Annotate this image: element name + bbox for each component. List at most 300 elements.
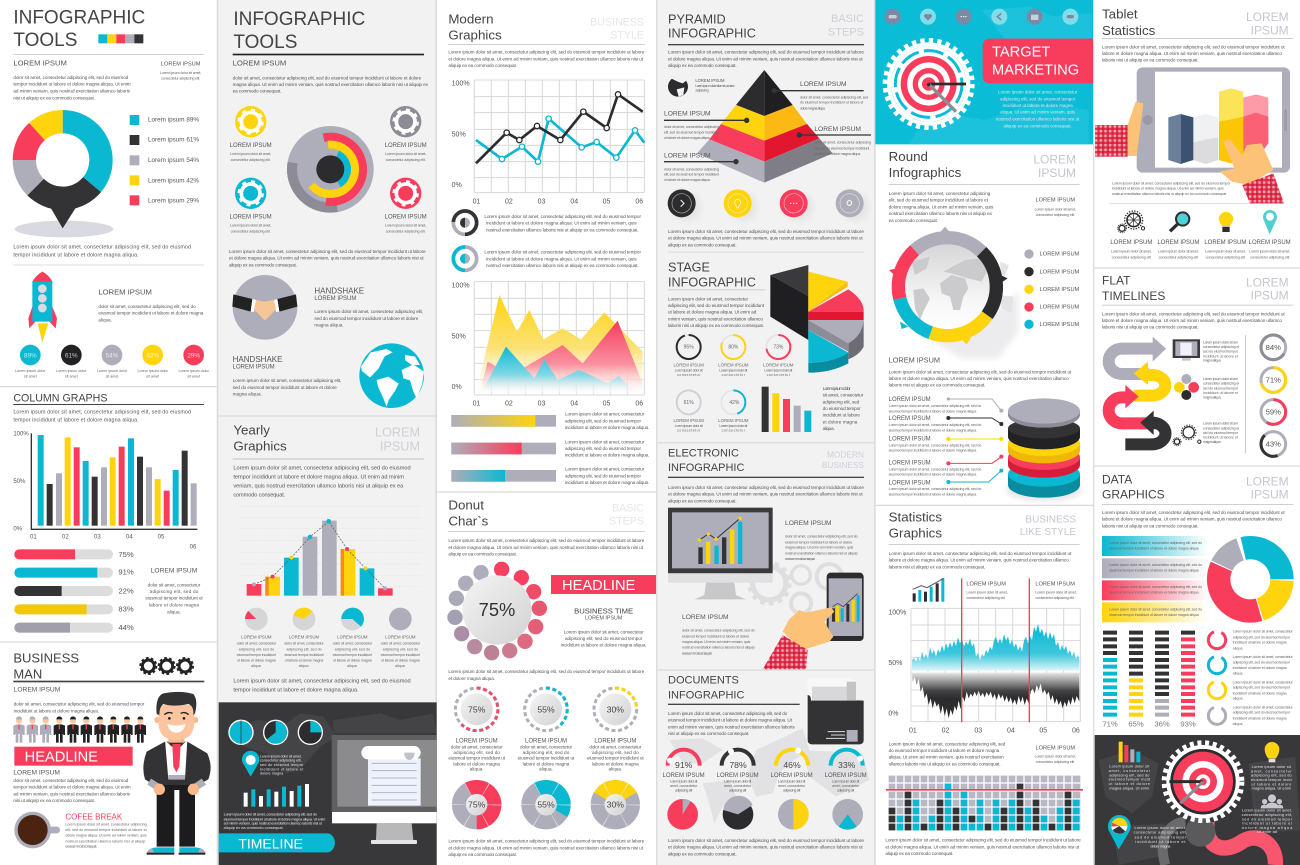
callout: gray: dolor sit amet, consectetur adipiscing [664, 167, 719, 171]
pie captions: adipiscing elit, sed do [383, 647, 418, 651]
mini bar icon [913, 578, 944, 602]
text: ex ea commodo consequat. [785, 557, 815, 561]
text: dolor sit amet, consectetur adipiscing elit, sed do eiusmod [13, 778, 129, 783]
icon captions: LOREM IPSUM [1204, 240, 1246, 246]
text [885, 838, 1081, 856]
business time text: Lorem ipsum dolor sit amet, consectetur [564, 629, 644, 634]
text: Lorem ipsum dolor sit amet, consectetur adipiscing elit, sed do [668, 711, 788, 716]
white text bottom: incididunt ut labore et [1135, 840, 1186, 844]
dashed donut 30%: 30% [607, 704, 624, 714]
heading: LIKE STYLE [1020, 527, 1076, 538]
callout: gray: elit, sed do eiusmod tempor incididunt [664, 173, 719, 177]
gauge captions: Lorem ipsum dolor sit [670, 780, 697, 784]
text: incididunt ut labore et dolore magna aliqua. Ut enim ad minim veniam, quis [1112, 187, 1224, 191]
gear labels: Lorem ipsum dolor sit amet, [385, 152, 426, 156]
gear labels: LOREM IPSUM [230, 215, 272, 221]
gradient bar text: adipiscing elit, sed do eiusmod tempor [565, 446, 641, 451]
percentage rings: 43% [1266, 440, 1281, 449]
percentage circles: sit amet [187, 375, 200, 379]
white text right: eiusmod tempor incid [1251, 778, 1292, 782]
text: LOREM IPSUM [1036, 198, 1075, 204]
percentage circles: Lorem ipsum dolor [15, 369, 46, 373]
progress rings: 42% [729, 400, 740, 406]
white text left: magna aliqua. Ut enim [1109, 786, 1149, 790]
pie captions: eiusmod tempor incididunt [284, 653, 324, 657]
pin text: incididunt ut labore et [260, 767, 303, 771]
text: elit, sed do eiusmod tempor incididunt ut labore et [889, 198, 989, 203]
donut captions: aliqua. [539, 767, 553, 772]
intro text: nisi ut aliquip ex ea commodo consequat. [13, 95, 95, 100]
labels [966, 581, 1077, 600]
heading: GRAPHICS [1102, 488, 1165, 502]
heading: LOREM [375, 426, 420, 440]
gradient bar text: Lorem ipsum dolor sit amet, consectetur [565, 467, 645, 472]
ring captions: consectetur [722, 428, 746, 432]
percentage rings: 84% [1266, 343, 1281, 352]
text: ex ea commodo consequat. [682, 651, 712, 655]
heading [668, 261, 765, 290]
pie captions: LOREM IPSUM [337, 635, 368, 640]
text [785, 520, 858, 561]
text: labore et dolore magna aliqua. Ut enim ad minim veniam, quis nostrud exercitation ullamco [1102, 51, 1282, 56]
progress text: adipiscing elit, sed do [150, 589, 199, 594]
percentage rings [1256, 330, 1290, 460]
text: LOREM IPSUM [889, 356, 940, 365]
panel: donut charts [447, 497, 656, 857]
heading: LOREM [1033, 153, 1076, 167]
heading: Lorem ipsum dolor sit amet, consectetur adipiscing elit, sed do eiusmod [13, 410, 191, 416]
heading: Modern [448, 11, 494, 26]
text [448, 538, 645, 557]
intro text: dolor sit amet, consectetur adipiscing elit, sed do eiusmod [13, 75, 129, 80]
bar chart: 0% [13, 526, 23, 532]
percentage circles: 54% [106, 352, 119, 359]
intro text: ea commodo consequat. [233, 89, 281, 94]
icon captions: Lorem ipsum dolor sit amet, [1205, 250, 1246, 254]
gradient bar text: incididunt ut labore et dolore magna aliqua. [565, 453, 649, 458]
text: Lorem ipsum dolor [823, 386, 851, 391]
text: Lorem ipsum dolor sit amet, consectetur adipiscing elit, sed do eiusmod tempor [1112, 181, 1231, 185]
text: aliquip ex ea commodo consequat. [229, 262, 297, 267]
text: dolor sit amet, consectetur adipiscing elit, sed do [785, 535, 858, 539]
stack callouts: eiusmod tempor incididunt ut labore et dolore magna aliqua. [889, 473, 977, 477]
donut captions: labore et dolore magna [592, 761, 639, 766]
headline banner [551, 575, 656, 594]
pie row [245, 608, 412, 630]
donut captions: adipiscing elit, sed do [453, 750, 500, 755]
title [233, 9, 424, 55]
gradient bar text: adipiscing elit, sed do eiusmod tempor [565, 418, 641, 423]
donut captions [448, 739, 644, 772]
title: TOOLS [13, 30, 77, 51]
text [668, 485, 864, 503]
text: nostrud exercitation ullamco laboris nisi ut aliquip [785, 551, 858, 555]
text: incididunt ut labore et dolore magna aliqua. [14, 708, 99, 713]
progress text [145, 568, 203, 614]
donut captions: dolor sit amet, consectetur [451, 744, 503, 749]
text [1102, 44, 1285, 63]
white text: incididunt ut labore et dolore magna [1003, 103, 1073, 108]
gradient labels: eiusmod tempor incididunt ut labore et dolore magna aliqua [1109, 591, 1200, 595]
waveform chart: 06 [1072, 728, 1080, 735]
line chart: 02 [505, 199, 513, 206]
progress text: dolor sit amet, consectetur [148, 582, 201, 587]
bar chart [244, 784, 309, 807]
heading [233, 423, 424, 460]
intro text: Lorem ipsum dolor sit amet, [160, 71, 201, 75]
gear labels: Lorem ipsum dolor sit amet, [230, 152, 271, 156]
panel: documents infographic [663, 674, 869, 856]
icon captions: LOREM IPSUM [1249, 240, 1291, 246]
white text left: Lorem ipsum dolor sit [1109, 765, 1150, 769]
text: incididunt ut labore et dolore magna aliqua. Ut enim ad minim veniam, quis [486, 221, 637, 226]
text [889, 356, 1072, 388]
coffee break text: elit, sed do eiusmod tempor incididunt ut labore et [65, 828, 147, 832]
icon captions: consectetur adipiscing elit [1159, 255, 1198, 259]
text: adipiscing elit, sed [823, 399, 860, 404]
text: ea commodo consequat. [889, 218, 938, 223]
icon: gears [140, 658, 193, 674]
heading: MODERN [827, 449, 864, 459]
gradient bars [451, 415, 556, 482]
gauge captions: amet, consectetur [724, 784, 752, 788]
text: aliquip ex ea commodo consequat. [448, 63, 517, 68]
progress rings [677, 335, 790, 414]
text: eiusmod tempor incididunt ut labore et dolore magna aliqua. Ut [668, 718, 793, 723]
heading: IPSUM [380, 439, 420, 453]
legend: Lorem ipsum 42% [148, 177, 199, 184]
waveform chart: 0% [888, 711, 898, 718]
ring captions: LOREM IPSUM [718, 418, 749, 423]
waveform chart: 03 [974, 728, 982, 735]
ring text: adipiscing elit, sed do eiusmod tempor [1233, 635, 1291, 639]
big petal donut [447, 562, 547, 660]
icon: document folder [808, 678, 864, 744]
heading: IPSUM [1251, 289, 1289, 303]
text: eiusmod tempor incididunt ut labore et dolore [785, 540, 852, 544]
gradient labels: Lorem ipsum dolor sit amet, consectetur adipiscing elit, sed do [1109, 585, 1202, 589]
stack callouts: LOREM IPSUM [889, 480, 931, 486]
icon captions: LOREM IPSUM [1157, 240, 1199, 246]
text: labore et dolore magna aliqua. Ut enim ad minim veniam, quis nostrud exercitation ullamco [889, 376, 1069, 381]
colour swatches [98, 34, 143, 43]
text: nisi ut aliquip ex ea commodo consequat. [13, 798, 95, 803]
white text lower right: consectetur adipiscing elit, [1242, 813, 1292, 817]
gradient bar text: adipiscing elit, sed do eiusmod tempor [565, 473, 641, 478]
gauge captions: amet, consectetur [778, 784, 806, 788]
timeline text [1203, 340, 1239, 444]
stack callouts: LOREM IPSUM [889, 437, 931, 443]
icon: pointing hand [763, 607, 834, 669]
gradient bar text: incididunt ut labore et dolore magna aliqua. [565, 425, 649, 430]
text: Lorem ipsum dolor sit amet, consectetur adipiscing elit, sed do eiusmod tempor incididunt ut labore [229, 249, 426, 254]
gear labels: consectetur adipiscing elit. [231, 229, 271, 233]
text: laboris nisi ut aliquip ex ea commodo consequat. [1102, 58, 1199, 63]
handshake text 2: sed do eiusmod tempor incididunt ut labore et dolore [233, 385, 337, 390]
rocket text: LOREM IPSUM [98, 288, 152, 297]
timeline text: incididunt ut labore et [1203, 354, 1238, 358]
timeline banner [219, 833, 335, 852]
percentage circles: 89% [24, 352, 37, 359]
heading: BUSINESS [1025, 515, 1076, 526]
gradient labels: eiusmod tempor incididunt ut labore et dolore magna aliqua [1109, 613, 1200, 617]
panel: yearly graphics [233, 423, 424, 694]
heading: STAGE [668, 261, 710, 275]
gauge captions: adipiscing elit [729, 788, 746, 792]
text: nisi ut aliquip ex ea commodo consequat. [668, 731, 749, 736]
bar chart: 05 [158, 535, 165, 541]
callout: gray: ut labore et dolore magna aliqua. [664, 178, 711, 182]
callout: yellow: ut labore et dolore magna aliqua. [664, 136, 711, 140]
white text left: ut labore et dolore [1109, 782, 1150, 786]
text: et dolore magna aliqua. Ut enim ad minim veniam, quis nostrud exercitation ullamco laboris nisi ut [885, 844, 1080, 849]
icon captions [1110, 240, 1291, 259]
heading [1102, 6, 1293, 39]
text: laboris nisi ut aliquip ex ea commodo consequat. [889, 564, 985, 569]
timeline text: magna aliqua. [1203, 440, 1222, 444]
ring captions: LOREM IPSUM [718, 363, 749, 368]
dashed donut 75% [455, 688, 498, 731]
heading: Tablet [1102, 6, 1138, 21]
text [1102, 311, 1285, 330]
gauge captions: LOREM IPSUM [825, 773, 867, 779]
callout: red: elit, sed do eiusmod tempor incididunt [814, 146, 869, 150]
white text: nostrud exercitation ullamco laboris nisi ut [996, 116, 1080, 121]
percentage circles: sit amet [146, 375, 159, 379]
legend: Lorem ipsum 89% [148, 117, 199, 124]
percentage rings: 71% [1266, 376, 1281, 385]
icon: teal gear [235, 178, 266, 209]
pie captions: dolor sit amet, consectetur [284, 642, 324, 646]
heading: Graphics [889, 525, 942, 540]
bar chart: 04 [126, 535, 133, 541]
handshake text 2: Lorem ipsum dolor sit amet, consectetur adipiscing elit, [233, 378, 341, 383]
icon: right hand [1220, 139, 1284, 203]
panel: infographic tools gears [229, 9, 429, 408]
gauge captions: Lorem ipsum dolor sit [778, 780, 805, 784]
text: Lorem ipsum dolor sit amet, consectetur adipiscing elit, sed do eiusmod tempor incididunt ut labore [668, 485, 864, 490]
pie captions: aliqua. [251, 664, 262, 668]
rocket text [98, 288, 204, 322]
coffee break text: dolore magna aliqua. Ut enim ad minim veniam, quis [65, 834, 147, 838]
white text left: eiusmod tempor incid [1109, 778, 1150, 782]
text: dolor sit amet, consectetur adipiscing elit, sed do eiusmod tempor [14, 701, 145, 706]
white text left: amet, consectetur [1109, 769, 1151, 773]
text [823, 386, 864, 431]
legend: Lorem ipsum 61% [148, 137, 199, 144]
timeline text: magna aliqua. [1203, 395, 1222, 399]
text [889, 191, 1076, 223]
pie captions: adipiscing elit, sed do [335, 647, 370, 651]
text: laboris nisi ut aliquip ex ea commodo consequat. [889, 383, 985, 388]
text: Lorem ipsum dolor sit amet, consectetur adipiscing elit, sed do eiusmod tempor incididunt ut [889, 369, 1072, 374]
heading: FLAT [1102, 273, 1131, 287]
heading: INFOGRAPHIC [668, 276, 756, 290]
legend: LOREM IPSUM [1040, 304, 1080, 310]
text: minim veniam, quis nostrud exercitation ullamco [668, 316, 763, 321]
progress bars: 91% [118, 568, 134, 577]
pie captions: adipiscing elit, sed do [239, 647, 274, 651]
bar chart: 02 [62, 535, 69, 541]
line chart: 0% [452, 182, 462, 189]
area chart: 03 [538, 401, 546, 408]
gradient labels: Lorem ipsum dolor sit amet, consectetur adipiscing elit, sed do [1109, 563, 1202, 567]
gear labels: consectetur adipiscing elit. [386, 229, 426, 233]
pin text: sed do eiusmod tempor [260, 763, 304, 767]
gradient labels [1102, 536, 1209, 622]
percentage circles: Lorem ipsum dolor [179, 369, 210, 373]
pie captions: eiusmod tempor incididunt [333, 653, 372, 657]
ring text: incididunt ut labore et dolore magna [1233, 641, 1288, 645]
icon captions: consectetur adipiscing elit [1112, 255, 1151, 259]
text: do eiusmod tempor [823, 406, 861, 411]
gears backdrop [749, 563, 842, 613]
legend: LOREM IPSUM [1040, 287, 1080, 293]
text: ut labore et dolore magna aliqua. Ut enim ad [668, 310, 757, 315]
pie captions: dolor sit amet, consectetur [381, 642, 421, 646]
panel: statistics graphics [885, 510, 1083, 856]
monitor chart [668, 508, 773, 599]
text: enim ad minim veniam, quis nostrud exercitation ullamco laboris [668, 724, 795, 729]
progress text: aliqua. [167, 609, 181, 614]
donut captions: aliqua. [608, 767, 622, 772]
rocket text: eiusmod tempor incididunt ut labore et dolore magna [98, 311, 204, 316]
pie charts [667, 796, 863, 830]
heading: STYLE [610, 30, 644, 42]
text: laboris nisi ut aliquip ex ea commodo consequat. [1102, 325, 1199, 330]
pin text: consectetur adipiscing elit, [260, 759, 302, 763]
text: Lorem ipsum dolor sit amet, consectetur adipiscing elit, sed do eiusmod tempor incididunt ut [1102, 510, 1285, 515]
ring text: adipiscing elit, sed do eiusmod tempor [1233, 711, 1291, 715]
text [668, 838, 864, 856]
text: commodo consequat. [233, 492, 286, 498]
intro text: LOREM IPSUM [233, 59, 286, 68]
timeline text: Lorem ipsum dolor sit am [1203, 377, 1238, 381]
white text: Lorem ipsum dolor sit amet, consectetur [998, 89, 1078, 94]
line chart: 05 [603, 199, 611, 206]
stack callouts: Lorem ipsum dolor sit amet, consectetur adipiscing elit, sed do [889, 467, 981, 471]
area chart: 0% [452, 384, 462, 391]
progress bars [14, 549, 134, 633]
business time text: adipiscing elit, sed do eiusmod tempor [565, 636, 643, 641]
text: Lorem ipsum dolor sit amet, consectetur adipiscing elit, sed do eiusmod tempor incididunt ut labore [668, 229, 864, 234]
icon captions: Lorem ipsum dolor sit amet, [1249, 250, 1290, 254]
icon: teal ring [453, 247, 477, 270]
text: LOREM IPSUM [785, 520, 832, 527]
waveform chart: 50% [888, 660, 902, 667]
white text right: ut labore et dolore [1251, 782, 1291, 786]
business time text: LOREM IPSUM [585, 616, 622, 622]
gauge row: 46% [783, 760, 801, 770]
white text right [1251, 765, 1292, 791]
progress text: labore et dolore magna [149, 602, 199, 607]
pie captions: LOREM IPSUM [241, 635, 272, 640]
icon: left hand [1095, 102, 1143, 157]
text [224, 813, 325, 830]
gauge row [667, 748, 863, 770]
gauge captions: LOREM IPSUM [717, 773, 759, 779]
pie captions: LOREM IPSUM [385, 635, 416, 640]
white text [996, 89, 1080, 128]
heading: tempor incididunt ut labore et dolore magna aliqua. [13, 418, 139, 424]
bar chart: 01 [30, 535, 37, 541]
timeline text: sed do eiusmod tempor [1203, 386, 1239, 390]
ring text: incididunt ut labore et dolore magna [1233, 716, 1288, 720]
heading: LOREM [1246, 474, 1289, 488]
heading [448, 497, 645, 532]
panel: stage infographic [668, 261, 864, 432]
dashed donut 55% [525, 688, 567, 731]
progress bars: 44% [118, 623, 134, 632]
pie captions: adipiscing elit, sed do [286, 647, 322, 651]
panel: flat timelines [1102, 273, 1293, 460]
rocket text: aliqua. [98, 317, 112, 322]
icon: light bulb [1265, 742, 1279, 762]
intro text: ad minim veniam, quis nostrud exercitation ullamco laboris [13, 88, 131, 93]
text: nostrud exercitation ullamco laboris nisi ut aliquip ex ea commodo consequat. [1112, 192, 1227, 196]
heading: Yearly [233, 423, 270, 438]
donut captions: adipiscing elit, sed do [592, 750, 639, 755]
icon: map pin with pie [1108, 815, 1131, 849]
heading: INFOGRAPHIC [668, 27, 756, 41]
donut captions: dolor sit amet, consectetur [520, 744, 572, 749]
text: incididunt ut labore et dolore magna aliqua. Ut enim ad minim veniam, quis [486, 256, 637, 261]
gradient labels: eiusmod tempor incididunt ut labore et dolore magna aliqua [1109, 546, 1200, 550]
text: dolore magna aliqua. Ut enim ad minim veniam, quis [889, 204, 994, 209]
text [889, 551, 1072, 569]
ring captions: LOREM IPSUM [674, 418, 704, 423]
intro text [13, 59, 201, 100]
round ring with globe [878, 217, 1018, 358]
waveform chart: 05 [1039, 728, 1047, 735]
stack callouts: eiusmod tempor incididunt ut labore et dolore magna aliqua. [889, 493, 977, 497]
text: Lorem ipsum dolor sit amet, consectetur adipiscing elit, sed do eiusmod tempor incididunt ut labore [448, 669, 645, 674]
ring captions: consectetur [677, 373, 701, 377]
segmented donut 75% [453, 781, 501, 829]
text: consectetur adipiscing elit. [1036, 213, 1075, 217]
text: et dolore magna aliqua. Ut enim ad minim veniam, quis nostrud exercitation ullamco laboris nisi ut [448, 56, 644, 61]
globe callout [695, 78, 735, 93]
percentage circles: 61% [65, 352, 78, 359]
heading: IPSUM [1251, 23, 1289, 37]
heading: DOCUMENTS [668, 674, 739, 686]
dashed donut 75%: 75% [468, 704, 486, 714]
gauge captions: LOREM IPSUM [771, 773, 813, 779]
donut captions: LOREM IPSUM [594, 739, 636, 745]
ring text: Lorem ipsum dolor sit amet, consectetur [1233, 655, 1293, 659]
ring captions: Lorem ipsum dolor sit [675, 369, 703, 373]
callout: red: LOREM IPSUM [814, 126, 861, 133]
percentage circles: Lorem ipsum dolor [97, 369, 128, 373]
text: aliquip ex ea commodo consequat. [448, 852, 517, 857]
white text bottom: consectetur adipiscing elit, [1134, 831, 1187, 835]
text: Lorem ipsum dolor sit amet, consectetur adipiscing elit, sed do eiusmod tempor [484, 250, 641, 255]
panel: data graphics [1102, 472, 1293, 728]
heading: COLUMN GRAPHS [13, 393, 107, 405]
text [668, 229, 864, 247]
coffee break text: Lorem ipsum dolor sit amet, consectetur adipiscing [65, 822, 147, 826]
text: Lorem ipsum dolor sit amet, consectetur adipiscing elit, sed do eiusmod tempor incididunt ut labore [668, 838, 864, 843]
pin text: dolore magna [260, 771, 284, 775]
gauge captions: Lorem ipsum dolor sit [832, 780, 859, 784]
area chart [452, 282, 644, 408]
legend: Lorem ipsum 54% [148, 157, 199, 164]
donut captions: LOREM IPSUM [525, 739, 567, 745]
panel: electronic infographic [668, 448, 864, 669]
3d pie chart [770, 265, 864, 373]
text: et dolore magna aliqua. Ut enim ad minim veniam, quis nostrud exercitation ullamco laboris nisi ut [668, 845, 863, 850]
percentage circles: sit amet [24, 375, 37, 379]
